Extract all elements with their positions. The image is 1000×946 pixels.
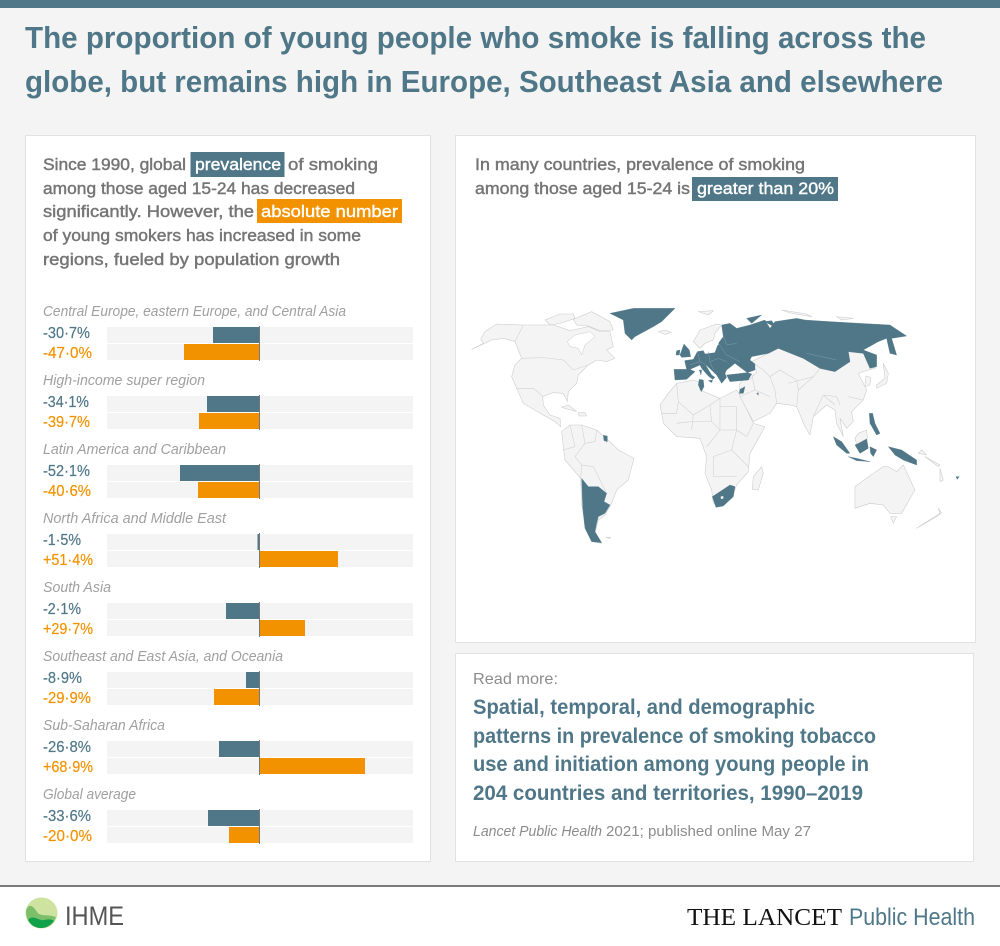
chart: Sub-Saharan Africa	[43, 717, 413, 776]
title: globe, but remains high in Europe, Southeast Asia and elsewhere	[25, 64, 943, 99]
citation: Lancet Public Health	[473, 823, 602, 840]
panel: world map	[456, 136, 976, 642]
map caption	[475, 155, 838, 201]
Americas	[472, 312, 634, 543]
chart: Sub-Saharan Africa: +68·9%	[43, 759, 93, 776]
chart: North Africa and Middle East: +51·4%	[43, 552, 93, 569]
intro text: significantly. However, the	[43, 202, 254, 221]
chart: South Asia: South Asia	[43, 579, 111, 596]
read more label: Read more:	[473, 671, 558, 688]
Europe and Russia dark	[674, 310, 907, 395]
intro text: of young smokers has increased in some	[43, 226, 361, 245]
intro text	[43, 152, 402, 269]
chart: Global average: -20·0%	[43, 828, 92, 845]
chart: Latin America and Caribbean: -40·6%	[43, 483, 91, 500]
Lancet wordmark: Public Health	[849, 904, 975, 931]
chart: Southeast and East Asia, and Oceania: -29·9%	[43, 690, 91, 707]
title	[25, 20, 943, 99]
Eurasia light	[739, 348, 888, 437]
top bar	[0, 0, 1000, 8]
citation	[473, 823, 811, 840]
Africa	[660, 379, 765, 507]
chart: Latin America and Caribbean: Latin America and Caribbean	[43, 441, 226, 458]
Greenland and Iceland	[610, 308, 713, 340]
intro text: prevalence	[195, 155, 281, 174]
chart: North Africa and Middle East: -1·5%	[43, 532, 81, 549]
chart: Latin America and Caribbean	[43, 441, 413, 500]
Lancet wordmark: THE LANCET	[687, 905, 842, 931]
chart: Global average	[43, 786, 413, 845]
chart: Sub-Saharan Africa: -26·8%	[43, 739, 91, 756]
chart: Southeast and East Asia, and Oceania	[43, 648, 413, 707]
chart: Global average: Global average	[43, 786, 136, 803]
intro text: among those aged 15-24 has decreased	[43, 179, 355, 198]
chart: Central Europe, eastern Europe, and Central Asia: -47·0%	[43, 345, 92, 362]
chart: Central Europe, eastern Europe, and Central Asia	[43, 303, 413, 362]
chart: High-income super region: -34·1%	[43, 394, 89, 411]
Lancet wordmark	[687, 904, 975, 931]
intro text: regions, fueled by population growth	[43, 250, 340, 269]
article title: use and initiation among young people in	[473, 752, 869, 776]
chart: South Asia	[43, 579, 413, 638]
IHME wordmark: IHME	[65, 901, 124, 931]
article title	[473, 695, 876, 805]
chart: High-income super region: High-income super region	[43, 372, 205, 389]
article title: Spatial, temporal, and demographic	[473, 695, 815, 719]
chart: Southeast and East Asia, and Oceania: -8·9%	[43, 670, 82, 687]
article title: 204 countries and territories, 1990–2019	[473, 781, 863, 805]
chart: Sub-Saharan Africa: Sub-Saharan Africa	[43, 717, 165, 734]
intro text: Since 1990, global	[43, 155, 186, 174]
article title: patterns in prevalence of smoking tobacco	[473, 724, 876, 748]
intro text: of smoking	[288, 155, 378, 174]
title: The proportion of young people who smoke is falling across the	[25, 20, 926, 55]
chart: High-income super region	[43, 372, 413, 431]
map caption: among those aged 15-24 is	[475, 179, 690, 198]
chart: Central Europe, eastern Europe, and Central Asia: Central Europe, eastern Europe, and Central Asia	[43, 303, 346, 320]
chart: North Africa and Middle East	[43, 510, 413, 569]
map caption: In many countries, prevalence of smoking	[475, 155, 805, 174]
chart: North Africa and Middle East: North Africa and Middle East	[43, 510, 227, 527]
intro text: absolute number	[261, 202, 398, 221]
Southeast Asia and Oceania	[833, 413, 959, 528]
chart: Central Europe, eastern Europe, and Central Asia: -30·7%	[43, 325, 90, 342]
chart: High-income super region: -39·7%	[43, 414, 90, 431]
chart: Latin America and Caribbean: -52·1%	[43, 463, 90, 480]
panel: regional change	[26, 136, 430, 862]
map caption: greater than 20%	[697, 179, 834, 198]
chart: South Asia: +29·7%	[43, 621, 93, 638]
chart: Global average: -33·6%	[43, 808, 91, 825]
chart: Southeast and East Asia, and Oceania: Southeast and East Asia, and Oceania	[43, 648, 283, 665]
world map	[472, 308, 959, 543]
citation: 2021; published online May 27	[606, 823, 811, 840]
footer	[0, 885, 1000, 946]
icon: IHME logo	[26, 898, 58, 928]
chart: South Asia: -2·1%	[43, 601, 81, 618]
panel: read more	[456, 654, 974, 862]
